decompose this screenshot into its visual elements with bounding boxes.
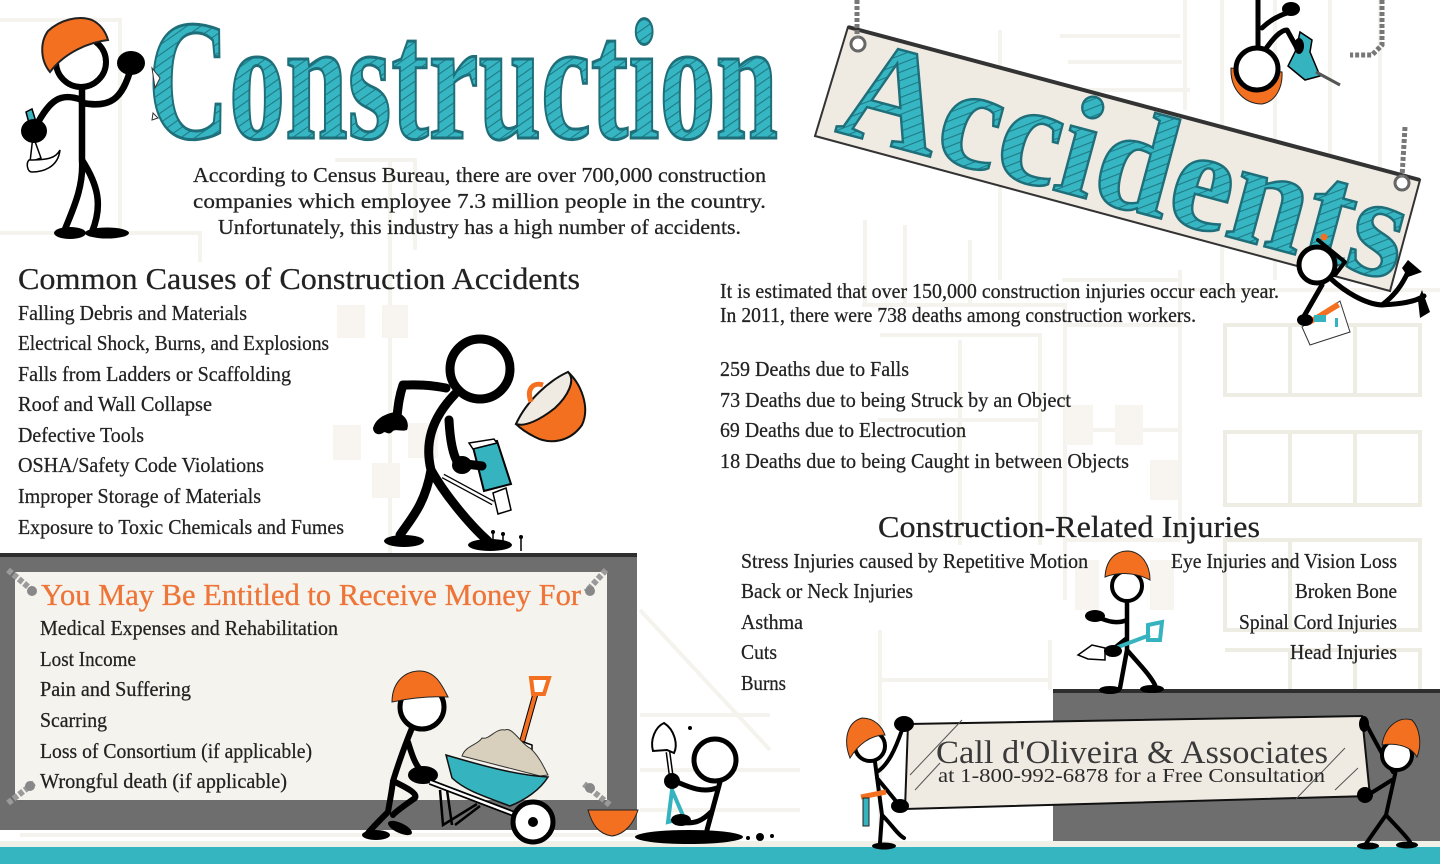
list: causes: OSHA/Safety Code Violations	[18, 453, 264, 477]
list: injuries right: Spinal Cord Injuries	[1239, 610, 1397, 634]
list: compensation: Wrongful death (if applicable)	[40, 769, 287, 793]
figure: left banner man	[847, 716, 914, 850]
heading: common causes: Common Causes of Construction Accidents	[18, 261, 580, 296]
list: deaths: 259 Deaths due to Falls	[720, 357, 909, 381]
list: injuries right: Broken Bone	[1295, 579, 1397, 603]
text: injury statistics: In 2011, there were 738 deaths among construction workers.	[720, 303, 1196, 327]
list: compensation: Lost Income	[40, 647, 136, 671]
list: injuries right	[1171, 549, 1397, 664]
list: injuries left: Stress Injuries caused by Repetitive Motion	[741, 549, 1088, 573]
list: injuries right: Eye Injuries and Vision Loss	[1171, 549, 1397, 573]
list: deaths: 69 Deaths due to Electrocution	[720, 418, 966, 442]
figure: right banner man	[1357, 716, 1420, 850]
list: causes: Falling Debris and Materials	[18, 301, 247, 325]
list: causes: Improper Storage of Materials	[18, 484, 261, 508]
figure: stickman digging a hole	[635, 723, 774, 844]
banner: call to action: Call d'Oliveira & Associates	[936, 735, 1328, 771]
list: injuries left: Burns	[741, 671, 786, 695]
falling hard hat	[588, 810, 638, 836]
text: injury statistics: It is estimated that over 150,000 construction injuries occur each year.	[720, 279, 1279, 303]
figure: stickman with shovel	[1078, 551, 1164, 694]
list: causes: Exposure to Toxic Chemicals and Fumes	[18, 515, 344, 539]
list: compensation: Scarring	[40, 708, 107, 732]
hanging sign: Accidents: Accidents	[826, 6, 1428, 312]
list: causes: Roof and Wall Collapse	[18, 392, 212, 416]
banner: call to action	[905, 716, 1370, 809]
list: causes	[18, 301, 344, 539]
intro text: companies which employee 7.3 million people in the country.	[193, 189, 766, 213]
hanging chain	[1350, 0, 1382, 55]
heading: related injuries: Construction-Related Injuries	[878, 509, 1260, 544]
list: compensation: Pain and Suffering	[40, 677, 191, 701]
list: injuries left: Cuts	[741, 640, 777, 664]
text: injury statistics	[720, 279, 1279, 327]
list: compensation	[40, 616, 338, 793]
list: injuries left: Back or Neck Injuries	[741, 579, 913, 603]
list: causes: Defective Tools	[18, 423, 144, 447]
figure: upside-down stickman with drill	[1231, 0, 1340, 104]
list: injuries right: Head Injuries	[1290, 640, 1397, 664]
list: causes: Falls from Ladders or Scaffolding	[18, 362, 291, 386]
list: deaths: 73 Deaths due to being Struck by an Object	[720, 388, 1071, 412]
list: deaths	[720, 357, 1129, 473]
list: injuries left	[741, 549, 1088, 695]
intro text: According to Census Bureau, there are over 700,000 construction	[193, 163, 767, 187]
panel: gray wall	[1053, 689, 1440, 841]
list: deaths: 18 Deaths due to being Caught in between Objects	[720, 449, 1129, 473]
list: compensation: Loss of Consortium (if applicable)	[40, 739, 312, 763]
list: compensation: Medical Expenses and Rehabilitation	[40, 616, 338, 640]
ground strip	[0, 841, 1440, 864]
figure: stickman with wheelbarrow	[362, 671, 553, 842]
banner: call to action: at 1-800-992-6878 for a Free Consultation	[938, 765, 1325, 787]
panel: money you may receive	[0, 553, 637, 830]
list: causes: Electrical Shock, Burns, and Explosions	[18, 331, 329, 355]
heading: entitled: You May Be Entitled to Receive Money For	[41, 577, 582, 612]
figure: stickman with nail gun and falling hat	[373, 339, 585, 551]
intro text: Unfortunately, this industry has a high number of accidents.	[218, 215, 741, 239]
list: injuries left: Asthma	[741, 610, 804, 634]
intro text	[193, 163, 767, 239]
figure: stickman with hammer and chisel	[21, 18, 160, 239]
figure: falling stickman with blueprint	[1297, 234, 1430, 345]
